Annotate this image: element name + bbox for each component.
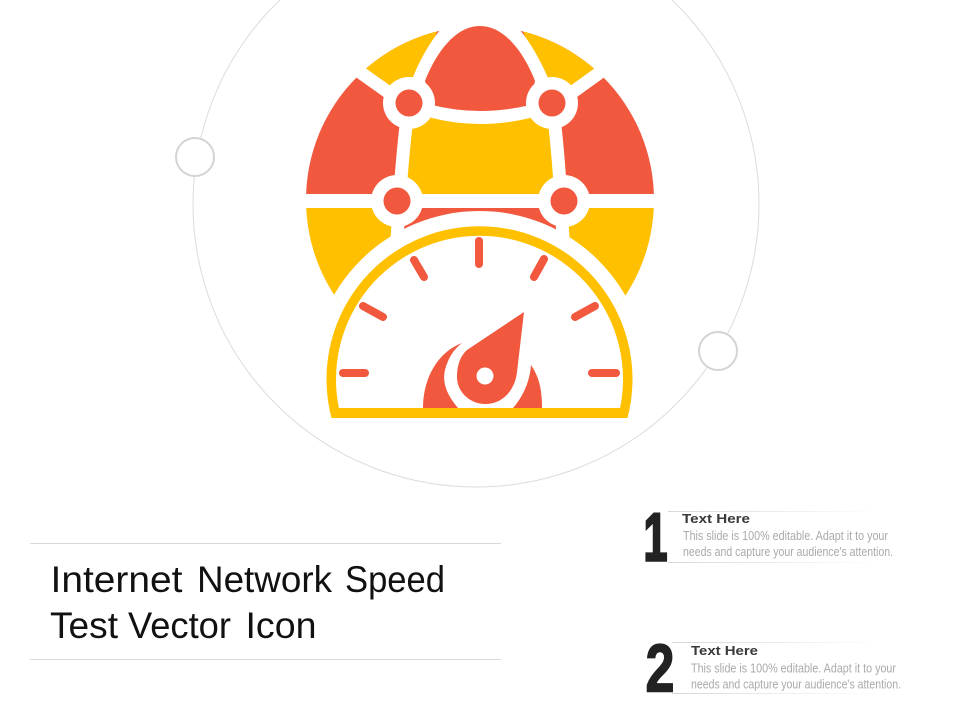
item 1: needs and capture your audience's attention. [683, 545, 893, 559]
title block: Speed [345, 559, 445, 600]
speed needle flame [423, 312, 542, 408]
icon: speedometer gauge [327, 226, 632, 418]
item 2 [646, 630, 901, 706]
item 1: 1 [644, 500, 668, 576]
network nodes [371, 77, 590, 227]
title block: Icon [246, 605, 316, 646]
item 2: This slide is 100% editable. Adapt it to your [691, 662, 896, 676]
decorative orbit ring with nodes [176, 0, 759, 487]
title block [30, 544, 501, 660]
title block: Network [197, 559, 332, 600]
title block: Internet [50, 559, 183, 600]
item 2: needs and capture your audience's attention. [691, 678, 901, 692]
item 1: This slide is 100% editable. Adapt it to your [683, 529, 888, 543]
title block: Test [50, 605, 119, 646]
title block: Vector [128, 605, 231, 646]
item 1 [644, 500, 893, 576]
item 2: 2 [646, 630, 674, 706]
icon: network globe [306, 26, 654, 309]
item 2: Text Here [691, 643, 758, 658]
item 1: Text Here [682, 511, 750, 526]
gauge tick marks [343, 241, 616, 373]
